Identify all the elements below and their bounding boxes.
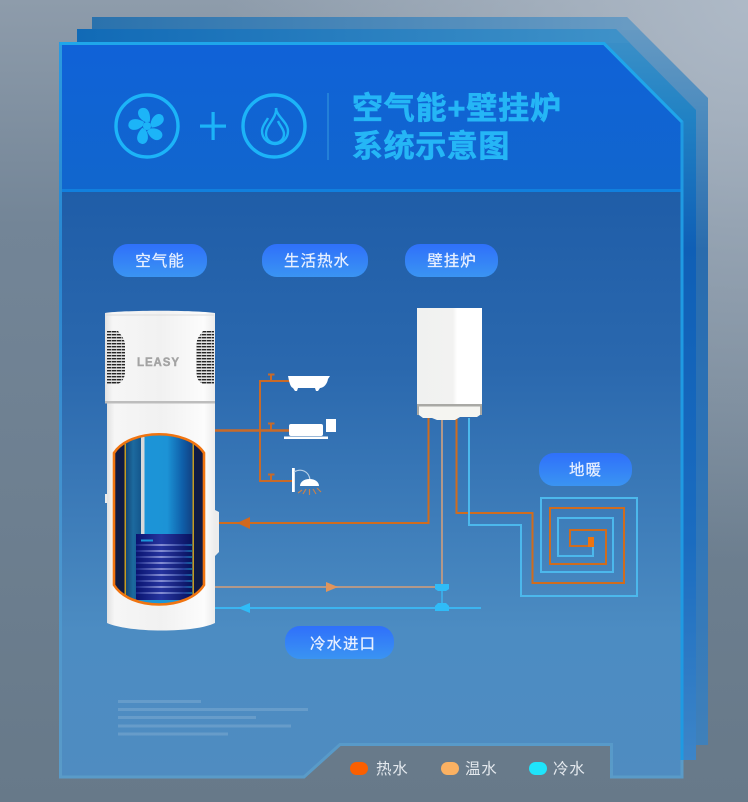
icon: fan [116,95,178,157]
panel: header band [60,43,683,190]
faint placeholder text lines [118,700,308,736]
legend item: warm water: 温水 [465,760,498,778]
main panel [60,43,683,778]
tank side fittings [105,494,219,556]
legend item: cold water [529,760,586,778]
icon: shower [292,468,321,495]
top seam [106,314,214,316]
label: wall boiler: 壁挂炉 [427,252,477,270]
legend item: cold water: 冷水 [553,760,586,778]
label: air energy: 空气能 [135,252,185,270]
label: floor heating [539,453,632,486]
label: wall boiler [405,244,498,277]
legend item: warm water [441,760,498,778]
right grille [196,331,214,384]
cutaway window [114,434,204,605]
label: air energy [113,244,207,277]
warm water pipe with arrow [215,418,442,592]
label: cold water inlet: 冷水进口 [310,635,376,653]
left grille [107,331,125,384]
air energy water tank [105,311,219,630]
floor heating hot water coil [456,418,624,583]
tank top unit [105,311,215,402]
header divider [327,93,329,160]
domestic hot water pipes [215,374,293,481]
label: cold water inlet [285,626,394,659]
title [352,91,562,164]
floor heating cold water coil [469,418,637,596]
label: domestic hot water: 生活热水 [284,252,350,270]
label: domestic hot water [262,244,368,277]
icon: wash basin [284,419,336,439]
icon: plus [200,112,226,140]
cold water pipe with arrow and valves [215,584,481,613]
brand logo: LEASY [137,357,179,369]
tank body [107,402,215,630]
wall-hung boiler [417,308,482,420]
back layer panel, far [92,17,708,745]
title: 空气能+壁挂炉 [352,91,562,126]
icon: bathtub [288,376,330,391]
legend item: hot water [350,760,409,778]
floor heating coil centre block [588,537,594,547]
legend item: hot water: 热水 [376,760,409,778]
boiler return pipe with arrow [217,418,428,529]
legend [350,760,586,778]
heating coil [136,534,192,605]
label: floor heating: 地暖 [569,461,602,479]
icon: flame [243,95,305,157]
top unit divider [105,401,215,404]
title: 系统示意图 [352,129,510,164]
back layer panel, near [77,29,696,760]
